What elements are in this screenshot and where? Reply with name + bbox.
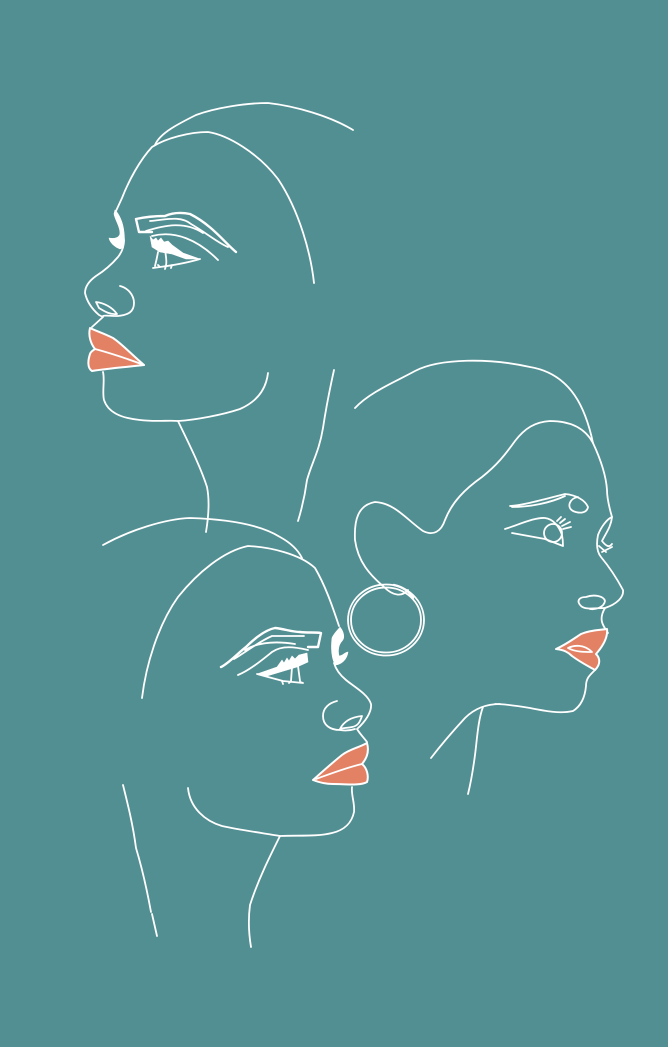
hair outline [155,103,353,145]
nostril [340,716,362,729]
eyebrow [221,628,321,667]
lips [313,743,368,784]
neck [178,370,334,532]
upper eyelid with lashes [257,653,308,676]
upper eyelid with lashes [150,236,200,259]
lips [88,328,144,371]
face: top left profile [85,103,353,532]
head and profile contour [85,132,314,327]
iris [544,524,562,542]
jaw line [495,670,595,712]
lower eyelid and iris [153,250,200,269]
earring [348,584,424,656]
head and profile contour [142,546,371,742]
nostril [96,302,117,314]
hair outline [103,518,302,558]
nose [103,286,134,316]
brow bone accent [331,627,348,665]
neck [123,785,280,947]
eyebrow [510,494,588,513]
head back and ear [355,421,593,595]
lower eyelid and iris [257,666,303,684]
neck [431,704,500,794]
lips [556,629,607,670]
eyebrow [136,213,236,252]
upper eyelid crease [152,234,218,260]
jaw line [103,372,268,421]
face: right profile [348,361,623,794]
nose loop [579,596,605,609]
eyelashes [557,517,571,529]
face: bottom centre profile [103,518,371,947]
upper eyelid crease [238,647,308,675]
jaw line [188,787,354,836]
eye [505,518,563,546]
hair outline [355,361,593,443]
nose [323,701,355,730]
brow bone accent [109,210,125,249]
brow bone and lashes accent [599,517,612,552]
profile contour [593,443,623,633]
